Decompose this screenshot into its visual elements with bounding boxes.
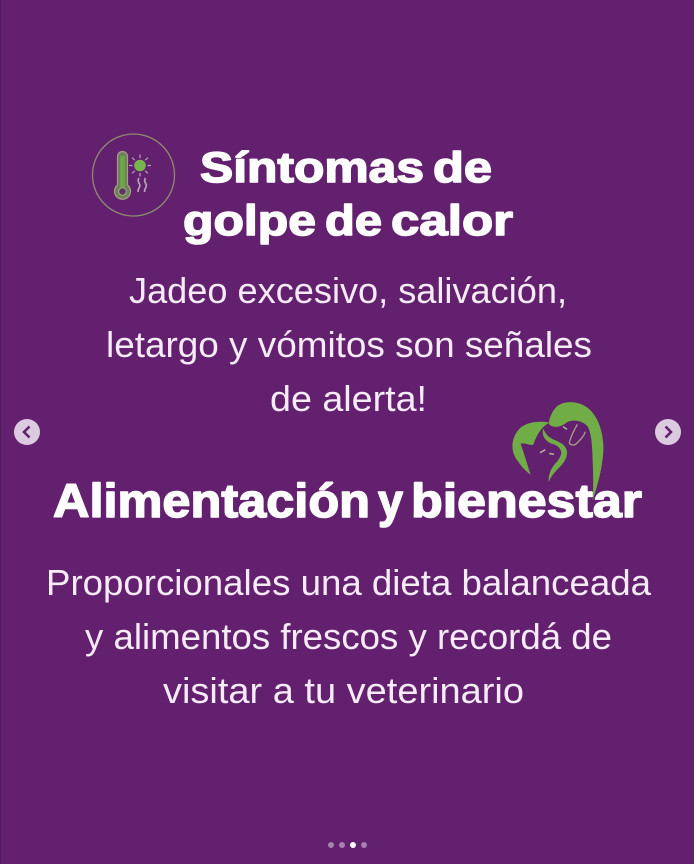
heading: Alimentación y bienestar <box>53 474 642 527</box>
heading: Alimentación y bienestar: Alimentación <box>53 474 370 527</box>
text block: nutrition and wellbeing: y alimentos frescos y recordá de <box>85 616 612 657</box>
text block: nutrition and wellbeing: visitar a tu veterinario <box>163 670 524 711</box>
icon: thermometer and sun <box>92 134 174 216</box>
heading: Alimentación y bienestar: bienestar <box>411 474 642 527</box>
text block: nutrition and wellbeing <box>46 562 652 711</box>
carousel pagination dots <box>328 842 367 848</box>
text block: heat stroke symptoms: letargo y vómitos son señales <box>106 324 592 365</box>
icon: next arrow <box>655 419 681 445</box>
text block: nutrition and wellbeing: Proporcionales una dieta balanceada <box>46 562 652 603</box>
heading: Síntomas de golpe de calor <box>183 144 513 245</box>
icon: dog and cat heart logo <box>512 402 603 501</box>
heading: Síntomas de golpe de calor: de <box>433 144 492 192</box>
text block: heat stroke symptoms <box>106 270 592 419</box>
icon: previous arrow <box>14 419 40 445</box>
text block: heat stroke symptoms: de alerta! <box>270 378 427 419</box>
heading: Síntomas de golpe de calor: Síntomas <box>200 144 424 192</box>
heading: Síntomas de golpe de calor: calor <box>391 197 513 245</box>
heading: Alimentación y bienestar: y <box>378 474 403 527</box>
text block: heat stroke symptoms: Jadeo excesivo, salivación, <box>129 270 567 311</box>
heading: Síntomas de golpe de calor: golpe <box>183 197 316 245</box>
heading: Síntomas de golpe de calor: de <box>325 197 382 245</box>
